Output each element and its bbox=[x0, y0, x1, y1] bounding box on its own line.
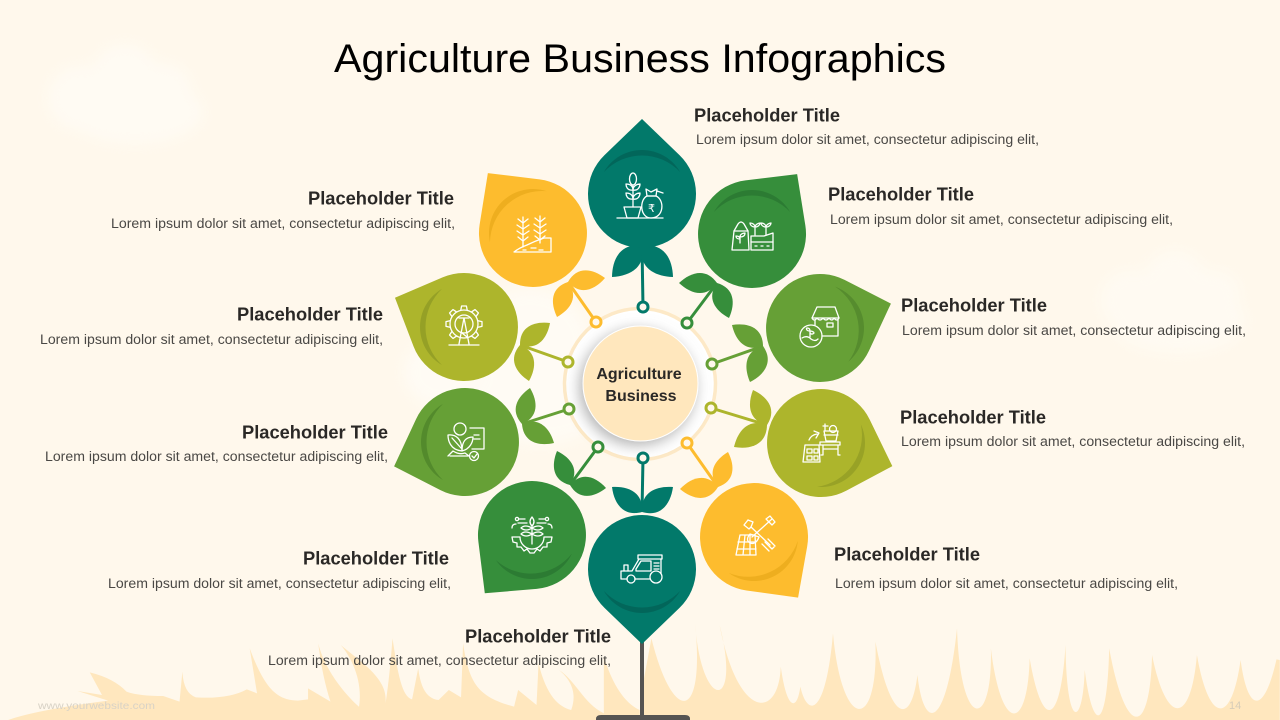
icon: wheat field bbox=[514, 216, 551, 252]
petal: left lower green bbox=[377, 373, 574, 517]
text block: bottom right: Lorem ipsum dolor sit amet, consectetur adipiscing elit, bbox=[835, 576, 1178, 591]
hub label: Business bbox=[605, 388, 677, 405]
title: Agriculture Business Infographics bbox=[334, 37, 946, 81]
text block: bottom centre: Placeholder Title bbox=[465, 626, 611, 646]
text block: top: Placeholder Title bbox=[694, 106, 840, 126]
text block: left upper bbox=[40, 304, 383, 347]
text block: right lower: Lorem ipsum dolor sit amet, consectetur adipiscing elit, bbox=[901, 434, 1245, 449]
hub outer ring bbox=[564, 308, 716, 460]
text block: left upper: Placeholder Title bbox=[237, 304, 383, 324]
text block: top right bbox=[828, 184, 1173, 227]
petal: left upper olive bbox=[374, 248, 573, 398]
petal: top teal bbox=[588, 119, 696, 312]
icon: tractor bbox=[621, 555, 662, 583]
text block: top left: Lorem ipsum dolor sit amet, consectetur adipiscing elit, bbox=[111, 216, 455, 231]
petal: bottom left green bbox=[443, 442, 611, 630]
text block: top left: Placeholder Title bbox=[308, 188, 454, 208]
grass silhouette bbox=[8, 623, 1280, 720]
cloud: behind centre bbox=[404, 289, 610, 444]
text block: top right: Placeholder Title bbox=[828, 184, 974, 204]
icon: market stall and building bbox=[803, 424, 840, 462]
centre hub bbox=[564, 308, 716, 460]
text block: right lower bbox=[900, 408, 1245, 449]
text block: right lower: Placeholder Title bbox=[900, 408, 1046, 428]
text block: bottom left: Placeholder Title bbox=[303, 548, 449, 568]
text block: bottom right bbox=[834, 544, 1178, 591]
page number: 14 bbox=[1229, 700, 1241, 712]
petal: top left yellow bbox=[445, 141, 609, 327]
petal: right upper green bbox=[707, 253, 908, 397]
text block: right upper: Placeholder Title bbox=[901, 296, 1047, 316]
petal: right lower olive bbox=[706, 375, 909, 518]
text block: top right: Lorem ipsum dolor sit amet, consectetur adipiscing elit, bbox=[830, 212, 1173, 227]
cloud: top left bbox=[48, 44, 203, 144]
text block: top bbox=[694, 106, 1039, 147]
text block: right upper: Lorem ipsum dolor sit amet, consectetur adipiscing elit, bbox=[902, 323, 1246, 338]
text block: bottom left: Lorem ipsum dolor sit amet, consectetur adipiscing elit, bbox=[108, 576, 451, 591]
text block: left lower: Lorem ipsum dolor sit amet, consectetur adipiscing elit, bbox=[45, 449, 388, 464]
hub label: Agriculture bbox=[596, 366, 682, 383]
text block: top left bbox=[111, 188, 455, 231]
text block: bottom centre bbox=[268, 626, 611, 668]
footer url: www.yourwebsite.com bbox=[37, 701, 155, 712]
icon: seed bag and planter bbox=[732, 222, 773, 250]
text block: left lower: Placeholder Title bbox=[242, 422, 388, 442]
petal: top right green bbox=[674, 140, 840, 328]
icon: gear and tower bbox=[446, 306, 482, 345]
cloud: right bbox=[1100, 250, 1246, 354]
icon: plant and document bbox=[448, 423, 484, 460]
text block: top: Lorem ipsum dolor sit amet, consectetur adipiscing elit, bbox=[696, 132, 1039, 147]
text block: bottom right: Placeholder Title bbox=[834, 544, 980, 564]
icon: solar panel and tools bbox=[736, 516, 775, 555]
icon: plant and money bag bbox=[617, 173, 663, 218]
icon: store and coin bbox=[800, 307, 839, 347]
text block: left upper: Lorem ipsum dolor sit amet, consectetur adipiscing elit, bbox=[40, 332, 383, 347]
petal: bottom right yellow bbox=[679, 438, 842, 629]
text block: bottom centre: Lorem ipsum dolor sit amet, consectetur adipiscing elit, bbox=[268, 653, 611, 668]
text block: left lower bbox=[45, 422, 388, 464]
petal: bottom teal bbox=[588, 453, 696, 644]
text block: bottom left bbox=[108, 548, 451, 591]
text block: right upper bbox=[901, 296, 1246, 338]
icon: plant in gear bbox=[512, 517, 552, 553]
tree trunk and base bbox=[596, 640, 690, 720]
icon: plant and money bag: ₹ bbox=[648, 202, 655, 215]
hub inner disc bbox=[583, 326, 698, 441]
